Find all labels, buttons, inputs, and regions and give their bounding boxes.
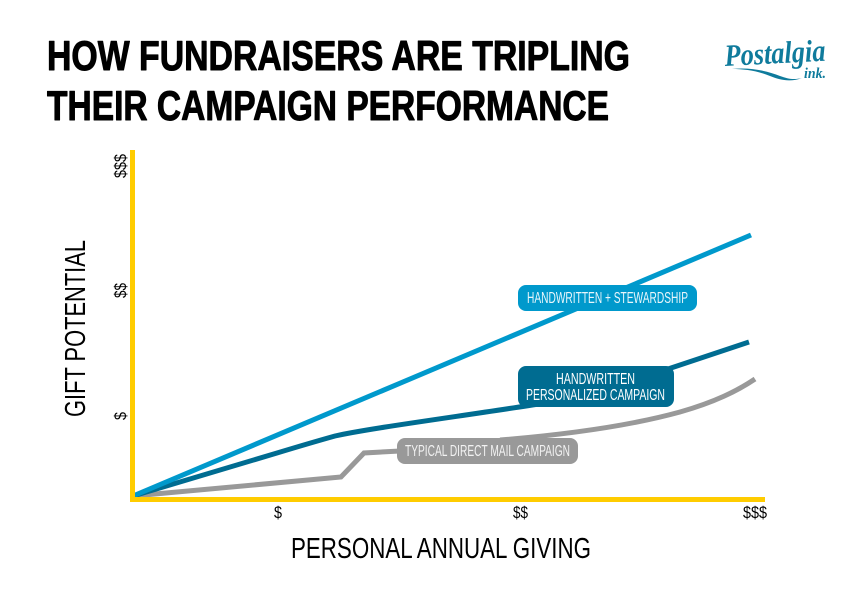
x axis tick labels: $$ [513,503,528,522]
y axis tick labels: $$$ [111,154,130,178]
y axis tick labels: $$ [111,283,130,298]
label: handwritten personalized campaign [518,366,674,407]
label: handwritten personalized campaign: HANDWRITTEN [556,371,635,388]
axes [132,150,765,500]
y axis title: GIFT POTENTIAL [60,240,92,417]
x axis tick labels: $$$ [743,503,767,522]
label: handwritten + stewardship [518,285,697,311]
logo: Postalgia ink: Postalgia [723,33,826,73]
line: typical direct mail campaign [133,379,755,496]
label: typical direct mail campaign [397,438,578,464]
title: HOW FUNDRAISERS ARE TRIPLING [47,32,630,79]
x axis title: PERSONAL ANNUAL GIVING [291,533,591,565]
title: THEIR CAMPAIGN PERFORMANCE [47,82,609,129]
label: handwritten + stewardship: HANDWRITTEN + STEWARDSHIP [527,290,688,307]
label: handwritten personalized campaign: PERSONALIZED CAMPAIGN [526,387,665,404]
line: handwritten personalized campaign [133,342,749,496]
logo: Postalgia ink [723,33,826,82]
logo: Postalgia ink: ink. [804,66,826,82]
label: typical direct mail campaign: TYPICAL DIRECT MAIL CAMPAIGN [405,443,570,460]
line: handwritten + stewardship [133,235,751,496]
y axis tick labels: $ [111,412,130,420]
x axis tick labels [274,503,767,522]
title [47,32,630,129]
y axis tick labels [111,154,130,420]
x axis tick labels: $ [274,503,282,522]
